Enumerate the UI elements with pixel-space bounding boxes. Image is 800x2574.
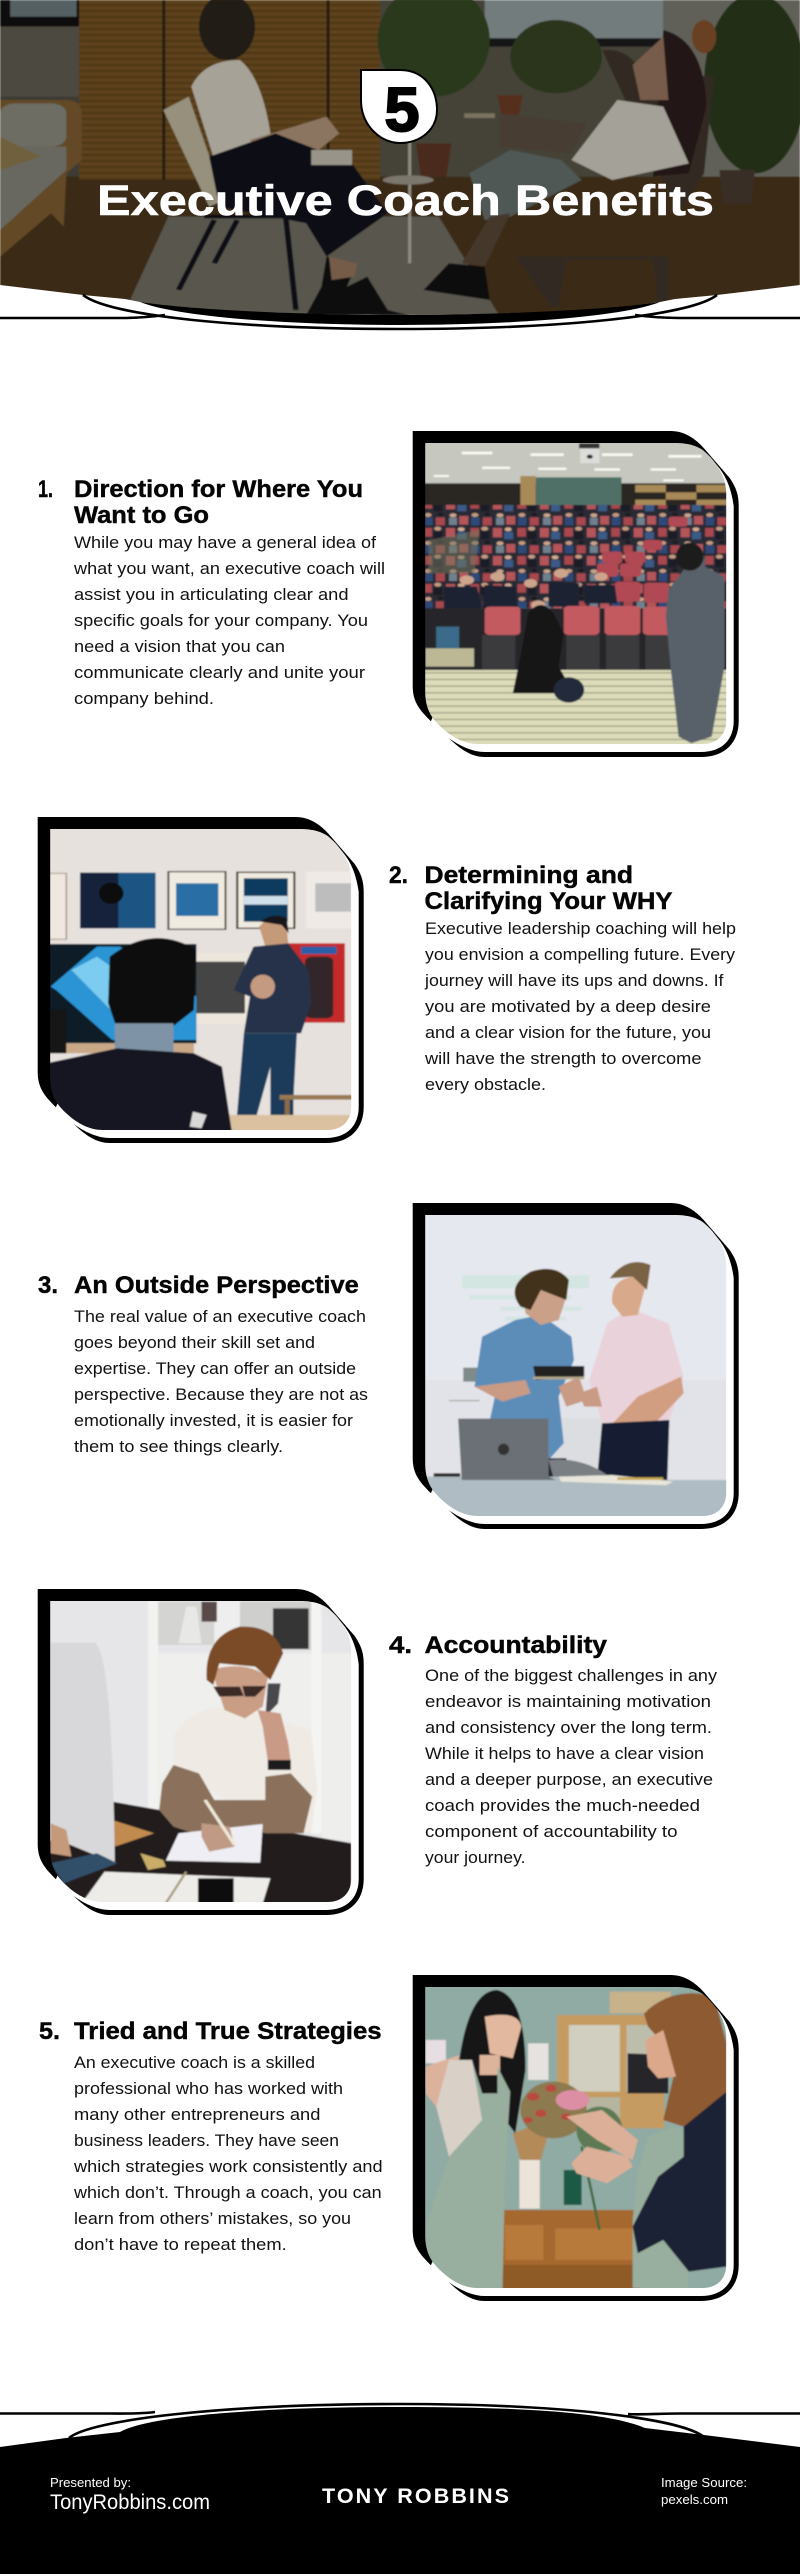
benefit 3 text [38,1272,368,1456]
benefit 3 body: expertise. They can offer an outside [74,1360,356,1378]
benefit 4 heading: Accountability [424,1632,608,1659]
title: Executive Coach Benefits [97,177,714,225]
benefit 1 body: company behind. [74,690,214,708]
benefit 1 body: While you may have a general idea of [74,534,376,552]
presented by: TonyRobbins.com [50,2491,210,2514]
shield badge with number 5: 5 [384,76,420,145]
benefit 1 body: assist you in articulating clear and [74,586,348,604]
footer [0,2404,800,2574]
benefit 5 body: learn from others’ mistakes, so you [74,2210,351,2228]
benefit 5 text [39,2018,383,2254]
benefit 4 body: and consistency over the long term. [425,1719,712,1737]
benefit 2 body: Executive leadership coaching will help [425,920,736,938]
benefit 2 heading: Clarifying Your WHY [424,888,672,915]
benefit 2 body: you are motivated by a deep desire [425,998,711,1016]
benefit 3 body: The real value of an executive coach [74,1308,366,1326]
benefit 3 body: goes beyond their skill set and [74,1334,315,1352]
benefit 1 body: need a vision that you can [74,638,285,656]
benefit 5 heading: 5. [39,2018,60,2045]
benefit 1 text [38,476,385,708]
benefit 2 text [389,862,736,1094]
curved line under header [0,295,800,329]
benefit 4 body: and a deeper purpose, an executive [425,1771,713,1789]
benefit 1 heading: Direction for Where You [74,476,363,503]
presented by: Presented by: [50,2475,131,2490]
benefit 2 body: will have the strength to overcome [424,1050,702,1068]
benefit 3 heading: 3. [38,1272,58,1299]
benefit 4 heading: 4. [389,1632,412,1659]
image source: Image Source: [661,2475,747,2490]
photo card 1: auditorium audience [413,431,739,757]
benefit 4 body [425,1667,718,1867]
benefit 3 body [74,1308,368,1456]
benefit 4 body: coach provides the much-needed [425,1797,700,1815]
benefit 3 body: them to see things clearly. [74,1438,283,1456]
photo card 5: two florists with a rose [413,1975,739,2301]
benefit 2 body: and a clear vision for the future, you [425,1024,711,1042]
photo card 3: two men at a whiteboard [413,1203,739,1529]
benefit 5 body: business leaders. They have seen [74,2132,339,2150]
benefit 4 text [389,1632,718,1867]
photo card 2: presenter in a gallery [38,817,364,1143]
header banner [0,0,800,340]
image source: pexels.com [661,2492,728,2507]
benefit 5 body: many other entrepreneurs and [74,2106,320,2124]
benefit 2 body [424,920,736,1094]
benefit 1 heading: Want to Go [74,502,209,529]
benefit 1 heading [38,476,363,529]
benefit 3 body: emotionally invested, it is easier for [74,1412,354,1430]
benefit 2 body: you envision a compelling future. Every [425,946,736,964]
benefit 1 body: specific goals for your company. You [74,612,368,630]
image source [661,2475,747,2507]
header photo: two women in a coaching session [0,0,800,340]
benefit 3 body: perspective. Because they are not as [74,1386,368,1404]
presented by [50,2475,210,2514]
footer curved line [0,2404,800,2438]
footer black panel [0,2407,800,2574]
benefit 5 body: which don’t. Through a coach, you can [73,2184,382,2202]
benefit 2 heading: 2. [389,862,408,889]
benefit 4 body: your journey. [425,1849,526,1867]
benefit 5 body: An executive coach is a skilled [74,2054,315,2072]
benefit 1 heading: 1. [38,476,53,503]
benefit 5 body: professional who has worked with [74,2080,343,2098]
benefit 1 body: communicate clearly and unite your [74,664,366,682]
photo card 4: woman on the phone at a desk [38,1589,364,1915]
benefit 2 heading: Determining and [424,862,633,889]
benefit 4 body: While it helps to have a clear vision [425,1745,704,1763]
shield badge with number 5 [361,70,437,145]
benefit 2 heading [389,862,672,915]
benefit 5 body: don’t have to repeat them. [74,2236,287,2254]
benefit 1 body [73,534,385,708]
benefit 5 body: which strategies work consistently and [73,2158,383,2176]
benefit 4 body: One of the biggest challenges in any [425,1667,718,1685]
benefit 2 body: journey will have its ups and downs. If [424,972,724,990]
benefit 1 body: what you want, an executive coach will [73,560,385,578]
benefit 5 heading: Tried and True Strategies [74,2018,382,2045]
benefit 3 heading: An Outside Perspective [74,1272,359,1299]
benefit 5 body [73,2054,383,2254]
benefit 4 body: endeavor is maintaining motivation [425,1693,711,1711]
curved black swoosh under header [140,302,660,325]
brand name: TONY ROBBINS [322,2485,511,2508]
benefit 4 body: component of accountability to [425,1823,678,1841]
benefit 2 body: every obstacle. [425,1076,546,1094]
